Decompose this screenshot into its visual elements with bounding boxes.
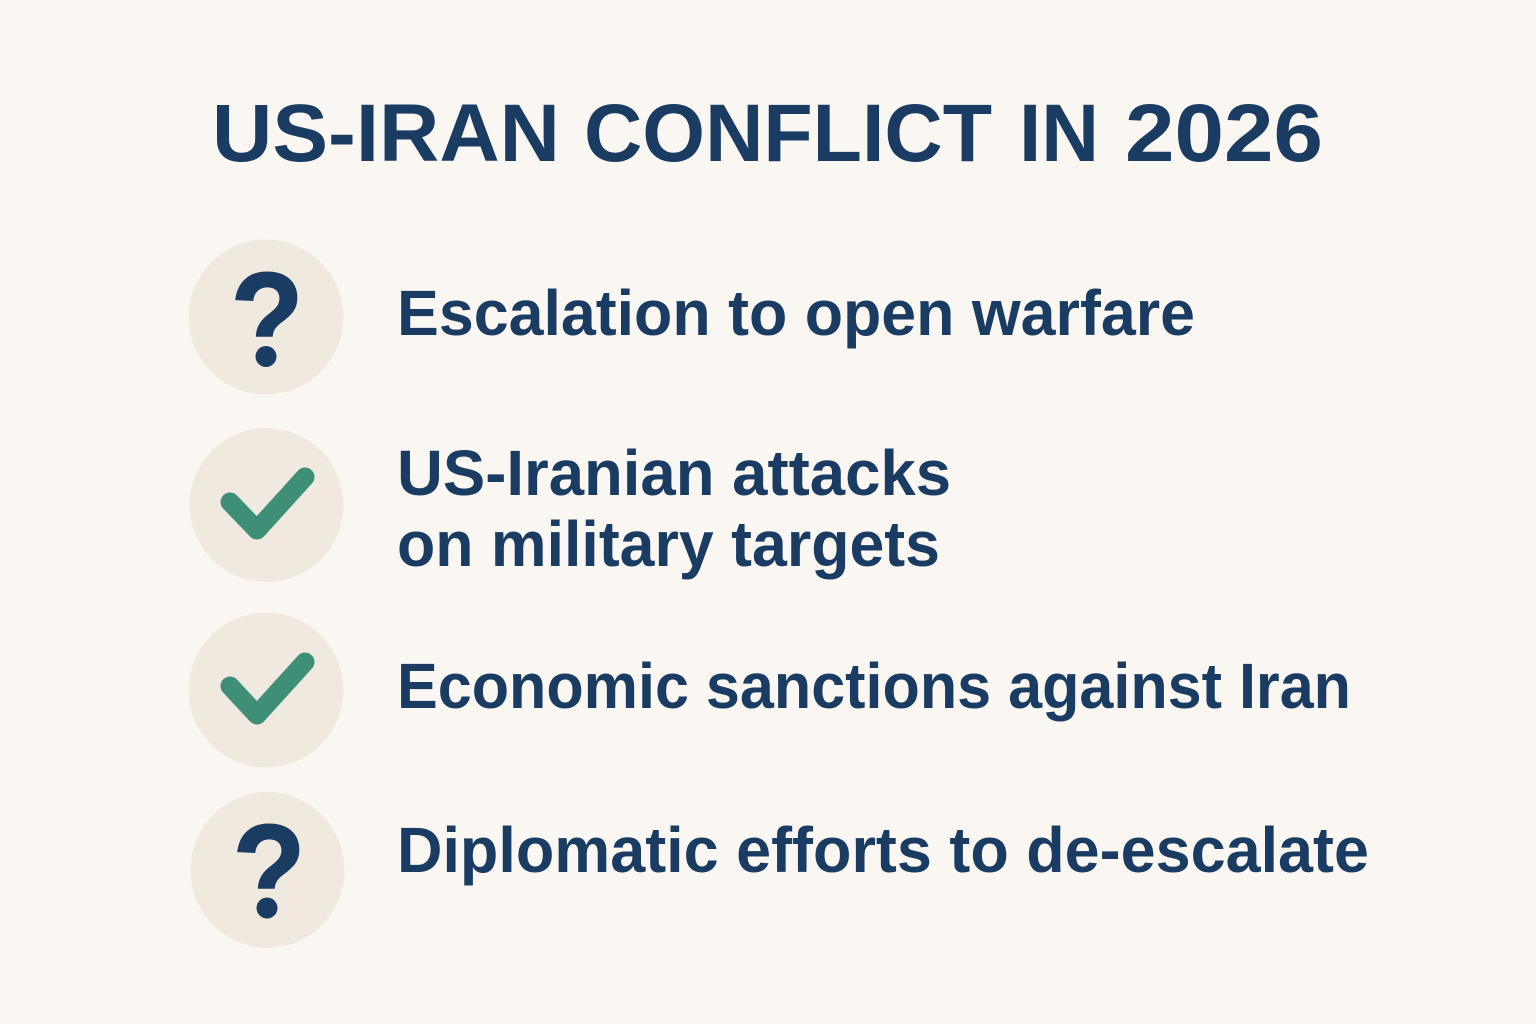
item 4: diplomacy bbox=[190, 792, 1369, 948]
label: escalation: Escalation to open warfare bbox=[397, 277, 1195, 349]
title: 2026 bbox=[1125, 88, 1323, 179]
item 2: attacks bbox=[190, 428, 951, 582]
label: sanctions: Economic sanctions against Iran bbox=[397, 650, 1351, 722]
title bbox=[212, 88, 1323, 179]
icon: question mark bbox=[190, 792, 344, 948]
icon: check mark bbox=[190, 428, 344, 582]
title: IN bbox=[1019, 88, 1099, 179]
icon: question mark bbox=[188, 240, 344, 394]
item 1: escalation bbox=[188, 240, 1195, 394]
icon: question mark: ? bbox=[230, 246, 304, 391]
label: attacks bbox=[397, 437, 951, 580]
label: attacks: US-Iranian attacks bbox=[397, 437, 951, 509]
label: diplomacy: Diplomatic efforts to de-escalate bbox=[397, 814, 1369, 886]
label: attacks: on military targets bbox=[397, 508, 940, 580]
icon: check mark bbox=[188, 612, 344, 768]
title: CONFLICT bbox=[584, 88, 992, 179]
title: US-IRAN bbox=[212, 88, 560, 179]
item 3: sanctions bbox=[188, 612, 1351, 768]
icon: question mark: ? bbox=[232, 798, 306, 943]
